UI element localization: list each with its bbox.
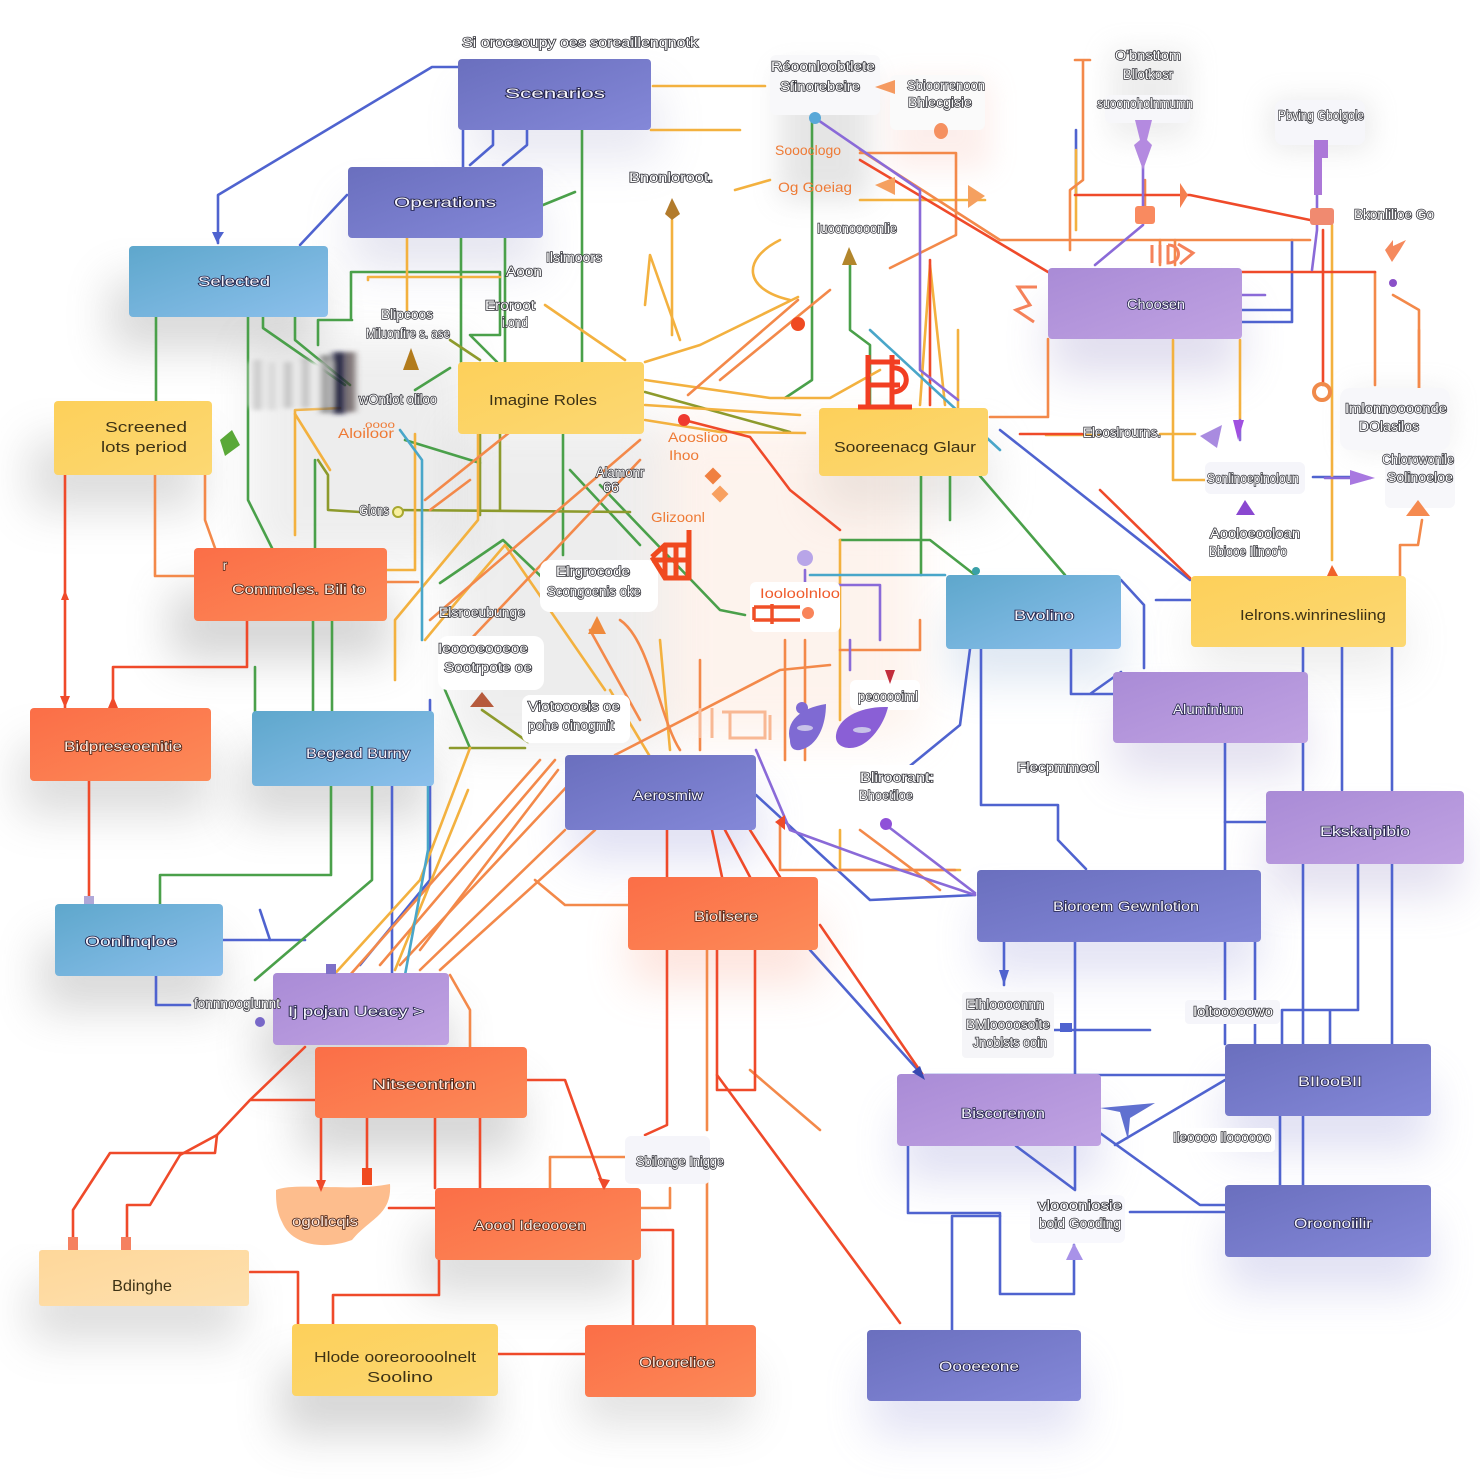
box: blue selected	[129, 246, 328, 317]
box: indigo lower right one	[1225, 1044, 1431, 1116]
box: yellow center	[458, 362, 644, 434]
free labels: Aoon	[506, 264, 542, 279]
free labels: peooooiml	[858, 689, 918, 704]
connectors: yellow and orange	[295, 86, 1332, 990]
connectors: olive and mustard	[318, 340, 790, 748]
free labels: Sbilonge Inigge	[636, 1154, 724, 1169]
box: yellow left	[54, 401, 212, 475]
free labels: BMloooosoite	[966, 1017, 1050, 1032]
box: purple aluminium	[1113, 672, 1308, 743]
box: peach bottom left	[39, 1250, 249, 1306]
free labels: pohe oinogmit	[528, 718, 614, 733]
box: top scenarios: Scenarios	[505, 85, 605, 101]
box: orange bottom center	[435, 1188, 641, 1260]
free labels: Bkonlilioe Go	[1354, 207, 1434, 222]
box: indigo wide: Bioroem Gewnlotion	[1053, 898, 1199, 914]
free labels: i.ond	[502, 315, 528, 330]
box: yellow right: Sooreenacg Glaur	[834, 439, 976, 456]
connectors: pink and violet	[756, 118, 1370, 895]
box: purple lower left: Ij pojan Ueacy >	[288, 1003, 424, 1019]
box: purple lower right: Biscorenon	[961, 1105, 1045, 1121]
box: blue lower left	[55, 904, 223, 976]
box: indigo bottom	[867, 1330, 1081, 1401]
free labels	[194, 35, 1454, 1231]
box: purple lower right	[897, 1074, 1101, 1146]
box: top scenarios	[458, 59, 651, 130]
free labels: fonnnooglunnt	[194, 996, 280, 1011]
box: indigo second	[348, 167, 543, 238]
box: orange lower left	[30, 708, 211, 781]
box: yellow far right: Ielrons.winrinesliing	[1240, 607, 1386, 624]
box: yellow left: Screened	[105, 419, 187, 436]
free labels: Flecpmmcol	[1017, 760, 1099, 775]
label cards	[438, 55, 1455, 1243]
orange labels: Iooloolnloo	[760, 585, 840, 601]
free labels: Imlonnoooonde	[1345, 401, 1447, 416]
box: blue right	[946, 575, 1121, 649]
free labels: 66	[603, 480, 619, 495]
free labels: Elhloooonnn	[966, 997, 1044, 1012]
box: purple top right	[1048, 268, 1242, 339]
free labels: Bhlecgisie	[908, 95, 972, 110]
free labels: Bllotkosr	[1123, 67, 1173, 82]
box: orange bottom: Oloorelioe	[639, 1354, 715, 1370]
box: peach bottom left: Bdinghe	[112, 1278, 172, 1295]
free labels: Blipcoos	[381, 307, 433, 322]
icon: coral glyphs	[700, 244, 1193, 740]
box: orange lower: Nitseontrion	[372, 1076, 476, 1092]
orange labels: Soooclogo	[775, 142, 841, 158]
free labels: Alamonr	[596, 465, 644, 480]
free labels: Jnoblsts ooin	[973, 1035, 1047, 1050]
free labels: Chlorowonile	[1382, 452, 1454, 467]
box: indigo second: Operations	[394, 194, 496, 210]
free labels: vloooniosie	[1038, 1198, 1122, 1213]
icon: red ladder top right	[858, 355, 912, 407]
orange labels: Ihoo	[669, 447, 699, 463]
free labels: Réoonloobtlete	[771, 59, 875, 74]
box: indigo lower right two: Oroonoiilir	[1294, 1215, 1372, 1231]
orange labels: Glizoonl	[651, 509, 705, 525]
box: indigo lower right two	[1225, 1185, 1431, 1257]
box: orange left: Commoles. Bili to	[232, 581, 366, 597]
box: yellow left: lots period	[101, 439, 187, 456]
free labels: boid Gooding	[1039, 1216, 1121, 1231]
free labels: O'bnsttom	[1115, 48, 1181, 63]
box: yellow center: Imagine Roles	[489, 392, 597, 409]
free labels: Solinoeloe	[1387, 470, 1453, 485]
icon markers	[60, 80, 1430, 1260]
box: blue right: Bvolino	[1014, 607, 1074, 623]
free labels: wOntlot oliloo	[358, 392, 437, 407]
box: yellow right	[819, 408, 988, 476]
blob: peach callout	[276, 1184, 390, 1245]
orange labels: oooo	[365, 420, 396, 431]
blurred text smudge	[250, 352, 354, 414]
box: blue middle left	[252, 711, 434, 786]
box: yellow far right	[1191, 576, 1406, 647]
free labels: Scongoenis oke	[547, 584, 641, 599]
free labels: Ieoooeooeoe	[438, 641, 528, 656]
free labels: Bbiooe Ilinoo'o	[1209, 544, 1287, 559]
box: indigo center: Aerosmiw	[633, 787, 704, 803]
box: orange left: r	[223, 557, 228, 573]
free labels: Eleoslrourns.	[1083, 425, 1161, 440]
free labels: Miluonfire s. ase	[366, 326, 450, 341]
free labels: Sfinorebeire	[780, 79, 860, 94]
box: purple lower left	[273, 973, 449, 1045]
box: orange bottom	[585, 1325, 756, 1397]
box: purple top right: Choosen	[1127, 296, 1185, 312]
box: indigo bottom: Oooeeone	[939, 1358, 1019, 1374]
free labels: Iuoonoooonlie	[817, 221, 897, 236]
blob: peach callout: ogolicqis	[292, 1213, 358, 1229]
free labels: Sbioorrenoon	[907, 78, 985, 93]
free labels: DOlasilos	[1359, 419, 1419, 434]
box: indigo lower right one: BIIooBII	[1298, 1073, 1362, 1089]
connectors: blue	[156, 67, 1392, 1330]
free labels: Ilsimoors	[546, 250, 602, 265]
free labels: Pbving Gbolgole	[1278, 108, 1364, 123]
box: orange lower	[315, 1047, 527, 1118]
free labels: Aooloeooloan	[1210, 526, 1300, 541]
orange labels	[338, 142, 852, 601]
icon: red grid center	[652, 530, 690, 580]
box: purple far right: Ekskaipibio	[1320, 823, 1410, 839]
free labels: Glons	[359, 503, 389, 518]
free labels: Sootrpote oe	[444, 660, 532, 675]
box: blue selected: Selected	[198, 273, 270, 289]
free labels: Ioltooooowo	[1193, 1004, 1273, 1019]
free labels: Bliroorant:	[860, 770, 934, 785]
box: indigo wide	[977, 870, 1261, 942]
box: purple aluminium: Aluminium	[1173, 701, 1243, 717]
box: yellow bottom	[292, 1324, 498, 1396]
free labels: Viotoooeis oe	[528, 699, 620, 714]
connectors: green	[156, 120, 1065, 980]
box: yellow bottom: Hlode ooreorooolnelt	[314, 1349, 477, 1366]
free labels: Sonlinoepinoloun	[1207, 471, 1299, 486]
icon: purple masks	[789, 702, 888, 750]
box: orange left	[194, 548, 387, 621]
box: orange center: Biolisere	[694, 908, 758, 924]
box: purple far right	[1266, 791, 1464, 864]
orange labels: Aooslioo	[668, 429, 728, 445]
free labels: Elsroeubunge	[439, 605, 525, 620]
free labels: Eroroot	[485, 298, 535, 313]
connectors: red	[65, 160, 1375, 1354]
box: yellow bottom: Soolino	[367, 1369, 433, 1386]
box: blue lower left: Oonlinqloe	[85, 933, 177, 949]
orange labels: Og Goeiag	[778, 179, 852, 195]
free labels: suoonoholnmumn	[1097, 96, 1193, 111]
box: orange lower left: Bidpreseoenitie	[64, 738, 182, 754]
free labels: Bhoetiloe	[859, 788, 913, 803]
free labels: Ileoooo lloooooo	[1173, 1130, 1271, 1145]
box: orange center	[628, 877, 818, 950]
icon: red bar gauge	[754, 604, 814, 624]
orange labels: Aloiloor	[338, 425, 394, 441]
free labels: Elrgrocode	[556, 564, 630, 579]
free labels: Bnonloroot.	[629, 170, 713, 185]
box: blue middle left: Begead Burny	[306, 745, 410, 761]
box: orange bottom center: Aoool Ideoooen	[474, 1217, 586, 1233]
free labels: Si oroceoupy oes soreaillenqnotk	[462, 35, 698, 50]
box: indigo center	[565, 755, 756, 830]
